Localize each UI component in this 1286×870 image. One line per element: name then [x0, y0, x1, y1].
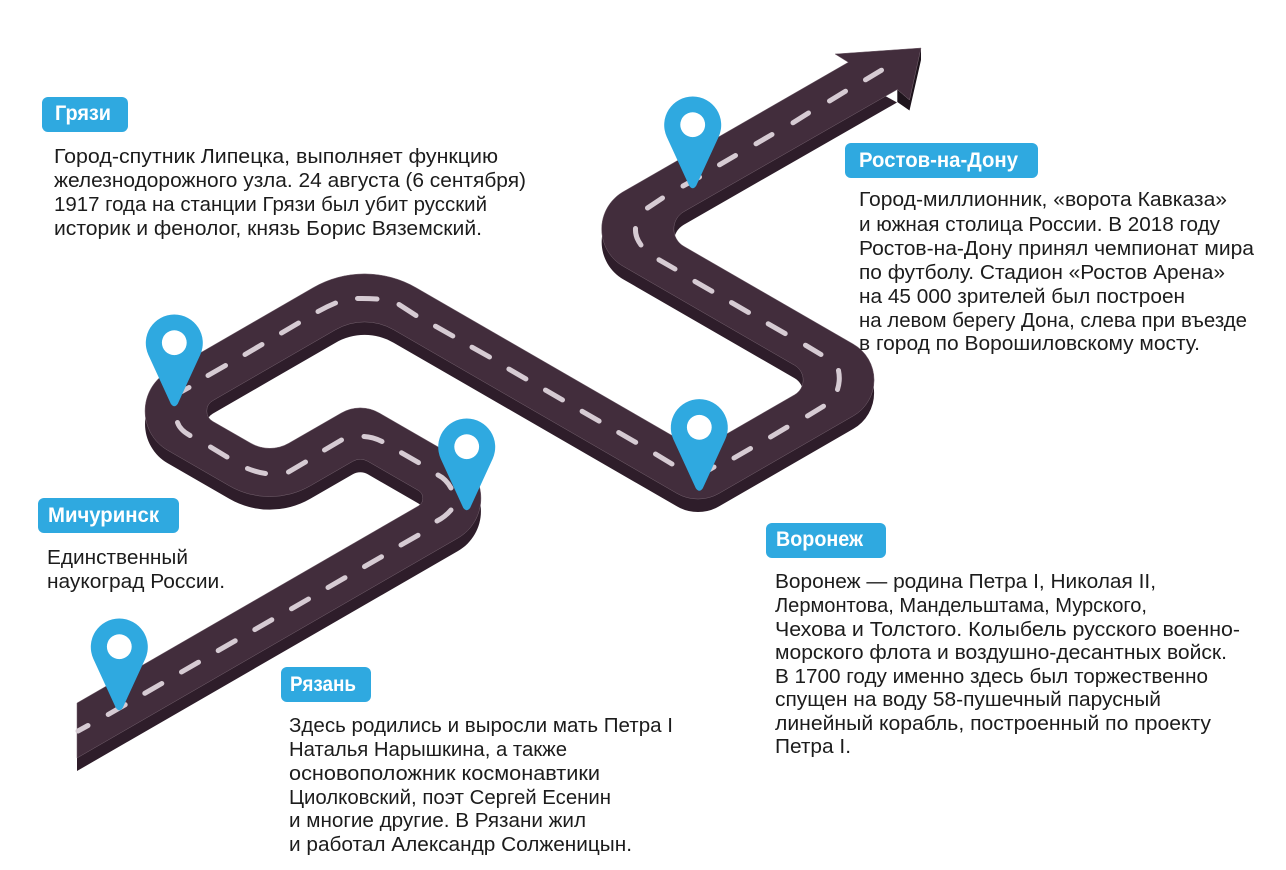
label: Rostov-on-Don: Ростов-на-Дону — [859, 149, 1018, 172]
label: Ryazan: Рязань — [290, 673, 356, 696]
text: Michurinsk: Единственный — [47, 547, 188, 569]
label: Michurinsk: Мичуринск — [48, 504, 159, 527]
text: Rostov-on-Don — [859, 189, 1255, 355]
text: Voronezh: спущен на воду 58-пушечный парусный — [775, 689, 1161, 711]
label: Voronezh: Воронеж — [776, 528, 864, 551]
text: Voronezh — [775, 571, 1240, 758]
road centre dashes — [78, 70, 882, 731]
text: Ryazan: и многие другие. В Рязани жил — [289, 810, 586, 832]
text: Ryazan: Здесь родились и выросли мать Петра I — [289, 715, 673, 737]
label: Rostov-on-Don — [845, 143, 1038, 178]
text: Voronezh: Воронеж — родина Петра I, Николая II, — [775, 571, 1156, 593]
panel: Ryazan — [281, 667, 673, 856]
text: Michurinsk: наукоград России. — [47, 571, 225, 593]
pin: Michurinsk — [91, 619, 148, 710]
text: Rostov-on-Don: и южная столица России. В 2018 году — [859, 214, 1220, 236]
label: Gryazi — [42, 97, 128, 132]
road surface — [77, 48, 921, 758]
text: Gryazi: 1917 года на станции Грязи был убит русский — [54, 194, 487, 216]
panel: Gryazi — [42, 97, 526, 240]
text: Gryazi: железнодорожного узла. 24 августа (6 сентября) — [54, 170, 526, 192]
label: Ryazan — [281, 667, 371, 702]
text: Voronezh: Петра I. — [775, 736, 851, 758]
label: Voronezh — [766, 523, 886, 558]
winding road with arrow — [77, 48, 921, 771]
text: Ryazan: и работал Александр Солженицын. — [289, 834, 632, 856]
text: Rostov-on-Don: на 45 000 зрителей был построен — [859, 286, 1185, 308]
panel: Voronezh — [766, 523, 1240, 758]
label: Gryazi: Грязи — [55, 102, 111, 125]
text: Gryazi: историк и фенолог, князь Борис Вяземский. — [54, 218, 482, 240]
panel: Rostov-on-Don — [845, 143, 1255, 355]
text: Voronezh: Лермонтова, Мандельштама, Мурского, — [775, 595, 1147, 617]
text: Gryazi — [54, 146, 526, 240]
text: Ryazan: Наталья Нарышкина, а также — [289, 739, 567, 761]
pin: Voronezh — [671, 399, 728, 491]
pin: Rostov-on-Don start — [664, 97, 721, 188]
panel: Michurinsk — [38, 498, 225, 593]
text: Ryazan: основоположник космонавтики — [289, 763, 600, 785]
text: Gryazi: Город-спутник Липецка, выполняет функцию — [54, 146, 498, 168]
text: Voronezh: Чехова и Толстого. Колыбель русского военно- — [775, 619, 1240, 641]
text: Ryazan — [289, 715, 673, 856]
text: Voronezh: В 1700 году именно здесь был торжественно — [775, 666, 1208, 688]
pin: Gryazi — [146, 315, 203, 406]
text: Rostov-on-Don: в город по Ворошиловскому мосту. — [859, 333, 1200, 355]
text: Rostov-on-Don: на левом берегу Дона, слева при въезде — [859, 310, 1247, 332]
road side depth — [77, 75, 897, 771]
text: Voronezh: морского флота и воздушно-десантных войск. — [775, 642, 1227, 664]
text: Voronezh: линейный корабль, построенный по проекту — [775, 713, 1211, 735]
text: Rostov-on-Don: Город-миллионник, «ворота Кавказа» — [859, 189, 1227, 211]
pin: Ryazan — [438, 419, 495, 510]
text: Ryazan: Циолковский, поэт Сергей Есенин — [289, 787, 611, 809]
text: Michurinsk — [47, 547, 225, 593]
arrow head side — [897, 48, 921, 110]
text: Rostov-on-Don: по футболу. Стадион «Ростов Арена» — [859, 262, 1225, 284]
label: Michurinsk — [38, 498, 179, 533]
text: Rostov-on-Don: Ростов-на-Дону принял чемпионат мира — [859, 238, 1255, 260]
